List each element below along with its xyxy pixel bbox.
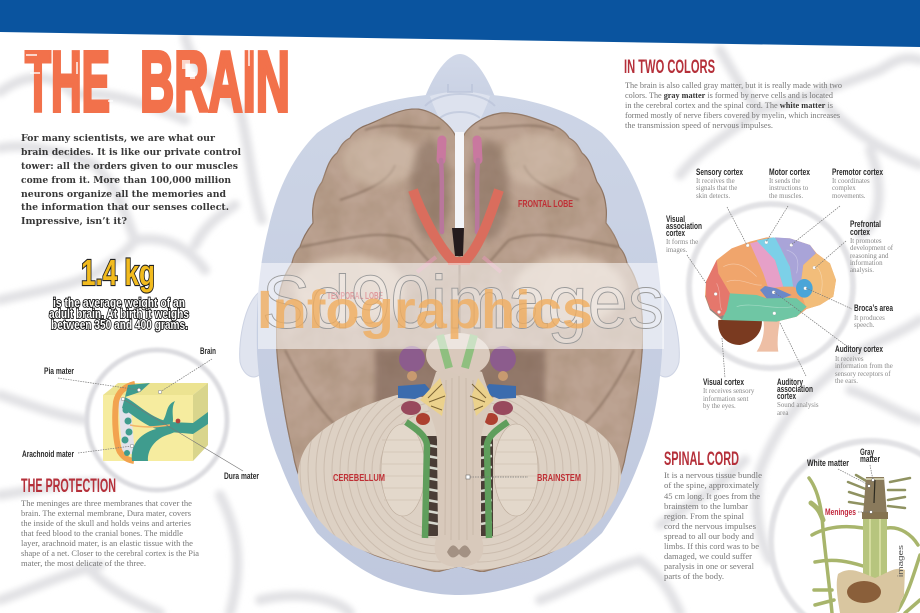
label: auditory association cortex: area — [777, 410, 788, 417]
label: prefrontal cortex: development of — [850, 245, 894, 252]
meninges labels: Arachnoid mater — [22, 449, 74, 459]
label: auditory association cortex — [777, 377, 819, 417]
protection text block: The meninges are three membranes that cover the — [21, 499, 192, 508]
spinal labels: White matter — [807, 458, 849, 468]
spinal cord text block: brainstem to the lumbar — [664, 502, 748, 511]
label: visual cortex: by the eyes. — [703, 403, 736, 410]
weight callout: 1.4 kg: 1.4 kg — [81, 252, 155, 293]
label: visual cortex: It receives sensory — [703, 388, 755, 395]
spinal cord text block: cord the nervous impulses — [664, 522, 756, 531]
label: motor cortex: It sends the — [769, 178, 800, 185]
protection text block: brain. The external membrane, Dura mater, covers — [21, 509, 191, 518]
weight callout: 1.4 kg: adult brain. At birth it weighs — [49, 307, 189, 321]
protection text block — [21, 499, 199, 568]
block of cortex — [103, 383, 208, 461]
label: premotor cortex — [832, 167, 883, 200]
meninges labels: Brain — [200, 346, 216, 356]
label: auditory association cortex: Auditory — [777, 377, 803, 387]
label: visual cortex — [703, 377, 755, 410]
label: premotor cortex: complex — [832, 185, 856, 192]
label: motor cortex: Motor cortex — [769, 167, 810, 177]
central dark hollow — [375, 349, 545, 430]
label: visual association cortex: It forms the — [666, 239, 698, 246]
top blue band — [0, 0, 920, 47]
label: prefrontal cortex — [850, 219, 894, 274]
dorsal rootlets — [848, 475, 910, 508]
label: motor cortex: the muscles. — [769, 193, 803, 200]
label: auditory cortex: Auditory cortex — [835, 344, 883, 354]
spinal cord text block: spread to all our body and — [664, 532, 755, 541]
cord segment — [862, 477, 888, 578]
meninges labels — [22, 346, 259, 481]
cortex leader lines — [687, 206, 852, 378]
protection text block: layer, arachnoid mater, is an elastic tissue with the — [21, 539, 193, 548]
brainstem side nerves — [406, 422, 508, 538]
protection text block: shape of a net. Closer to the cerebral cortex is the Pia — [21, 549, 199, 558]
dark fold shading — [285, 125, 634, 430]
weight callout: 1.4 kg — [49, 252, 189, 332]
label: visual cortex: information sent — [703, 396, 748, 403]
label: premotor cortex: movements. — [832, 193, 866, 200]
label: auditory association cortex: cortex — [777, 391, 796, 401]
spinal cord text block: region. From the spinal — [664, 512, 745, 521]
central brain illustration — [240, 54, 679, 610]
label: sensory cortex: It receives the — [696, 178, 735, 185]
lobe labels: CEREBELLUM — [333, 473, 385, 484]
label: prefrontal cortex: It promotes — [850, 238, 882, 245]
intro paragraph: come from it. More than 100,000 million — [21, 175, 231, 186]
spinal cord text block: damaged, we could suffer — [664, 552, 752, 561]
label: visual association cortex: images. — [666, 247, 688, 254]
protection text block: the inside of the skull and holds veins and arteries — [21, 519, 191, 528]
label: visual association cortex — [666, 214, 702, 254]
cerebellum — [298, 395, 621, 570]
two colors text block — [625, 81, 842, 130]
spinal cord text block: limbs. If this cord was to be — [664, 542, 759, 551]
label: broca's area: Broca’s area — [854, 303, 894, 313]
label: broca's area — [854, 303, 894, 329]
meninges labels: Pia mater — [44, 366, 74, 376]
spinal cord text block: of the spine, approximately — [664, 481, 760, 490]
title: THE — [25, 35, 110, 130]
label: premotor cortex: Premotor cortex — [832, 167, 883, 177]
label: broca's area: It produces — [854, 315, 885, 322]
watermark band: Sd90images — [262, 260, 664, 344]
nose — [415, 54, 505, 130]
two colors text block: in the cerebral cortex and the spinal cord. The white matter is — [625, 101, 833, 110]
spinal labels — [807, 447, 880, 517]
intro paragraph — [21, 133, 241, 227]
two colors text block: formed mostly of nerve fibers covered by myelin, which increases — [625, 111, 840, 120]
spinal cord illustration — [771, 441, 920, 613]
label: prefrontal cortex: reasoning and — [850, 253, 889, 260]
colored side-view brain — [705, 237, 836, 352]
two colors text block: the transmission speed of nervous impulses. — [625, 121, 773, 130]
brain meninges diagram — [22, 346, 259, 490]
midline slit — [452, 132, 464, 256]
label: prefrontal cortex: Prefrontal — [850, 219, 881, 229]
label: visual association cortex: association — [666, 221, 702, 231]
vertebra — [837, 569, 905, 613]
spinal cord text block: It is a nervous tissue bundle — [664, 471, 762, 480]
spinal cord text block: paralysis in one or several — [664, 562, 755, 571]
spinal labels: Gray — [860, 447, 874, 457]
label: sensory cortex: Sensory cortex — [696, 167, 743, 177]
label: visual association cortex: Visual — [666, 214, 685, 224]
intro paragraph: brain decides. It is like our private control — [21, 147, 241, 158]
protection text block: that feed blood to the cranial bones. The middle — [21, 529, 183, 538]
watermark band: Infographics — [257, 280, 593, 340]
label: motor cortex — [769, 167, 810, 200]
spinal cord text block — [664, 471, 762, 581]
weight callout: 1.4 kg: is the average weight of an — [53, 296, 185, 310]
label: premotor cortex: It coordinates — [832, 178, 870, 185]
label: prefrontal cortex: information — [850, 260, 883, 267]
brainstem — [420, 370, 494, 567]
spinal cord text block: 45 cm long. It goes from the — [664, 492, 760, 501]
two colors text block: colors. The gray matter is formed by nerve cells and is located — [625, 91, 834, 100]
lobe labels: TEMPORAL LOBE — [327, 291, 383, 302]
olfactory nerves — [441, 140, 478, 232]
label: visual association cortex: cortex — [666, 228, 685, 238]
heading: the protection: THE PROTECTION — [21, 476, 116, 497]
two colors text block: The brain is also called gray matter, but it is really made with two — [625, 81, 842, 90]
intro paragraph: tower: all the orders given to our muscles — [21, 161, 238, 172]
intro paragraph: For many scientists, we are what our — [21, 133, 216, 144]
label: prefrontal cortex: cortex — [850, 227, 870, 237]
spinal labels: matter — [860, 454, 880, 464]
lobe labels: BRAINSTEM — [537, 473, 581, 484]
spinal labels: Meninges — [825, 507, 856, 517]
label: prefrontal cortex: analysis. — [850, 267, 874, 274]
label: auditory cortex: It receives — [835, 356, 864, 363]
meninges labels: Dura mater — [224, 471, 259, 481]
yellow nerve fans — [420, 378, 446, 416]
heading: in two colors: IN TWO COLORS — [624, 57, 715, 78]
label: auditory cortex: the ears. — [835, 378, 858, 385]
arteries — [413, 190, 501, 272]
protection text block: mater, the most delicate of the three. — [21, 559, 146, 568]
intro paragraph: Impressive, isn’t it? — [21, 216, 127, 227]
brain cortex map — [666, 167, 894, 417]
spinal cord text block: parts of the body. — [664, 572, 724, 581]
title — [25, 35, 290, 130]
label: auditory association cortex: association — [777, 384, 813, 394]
vertical credit: images — [898, 544, 905, 577]
intro paragraph: neurons organize all the memories and — [21, 189, 226, 200]
label: auditory association cortex: Sound analysis — [777, 402, 819, 409]
cranial nerve clusters — [398, 346, 516, 425]
heading: spinal cord: SPINAL CORD — [664, 449, 739, 470]
weight callout: 1.4 kg: between 350 and 400 grams. — [51, 318, 188, 332]
label: auditory cortex: sensory receptors of — [835, 371, 891, 378]
label: motor cortex: instructions to — [769, 185, 809, 192]
leader lines — [58, 359, 243, 471]
lobe labels — [327, 199, 581, 484]
title: BRAIN — [140, 35, 290, 130]
nose-shadow arcs — [425, 84, 495, 118]
pons — [426, 333, 490, 377]
label: broca's area: speech. — [854, 322, 875, 329]
skull — [257, 93, 662, 595]
label: sensory cortex: signals that the — [696, 185, 737, 192]
label: visual cortex: Visual cortex — [703, 377, 744, 387]
lobe labels: FRONTAL LOBE — [518, 199, 573, 210]
cerebrum — [276, 109, 643, 572]
nerve roots — [809, 478, 920, 613]
label: sensory cortex — [696, 167, 743, 200]
label: auditory cortex: information from the — [835, 363, 893, 370]
label: auditory cortex — [835, 344, 893, 385]
label: sensory cortex: skin detects. — [696, 193, 730, 200]
ears — [240, 290, 679, 377]
optic nerves — [440, 335, 474, 368]
intro paragraph: the information that our senses collect. — [21, 202, 229, 213]
